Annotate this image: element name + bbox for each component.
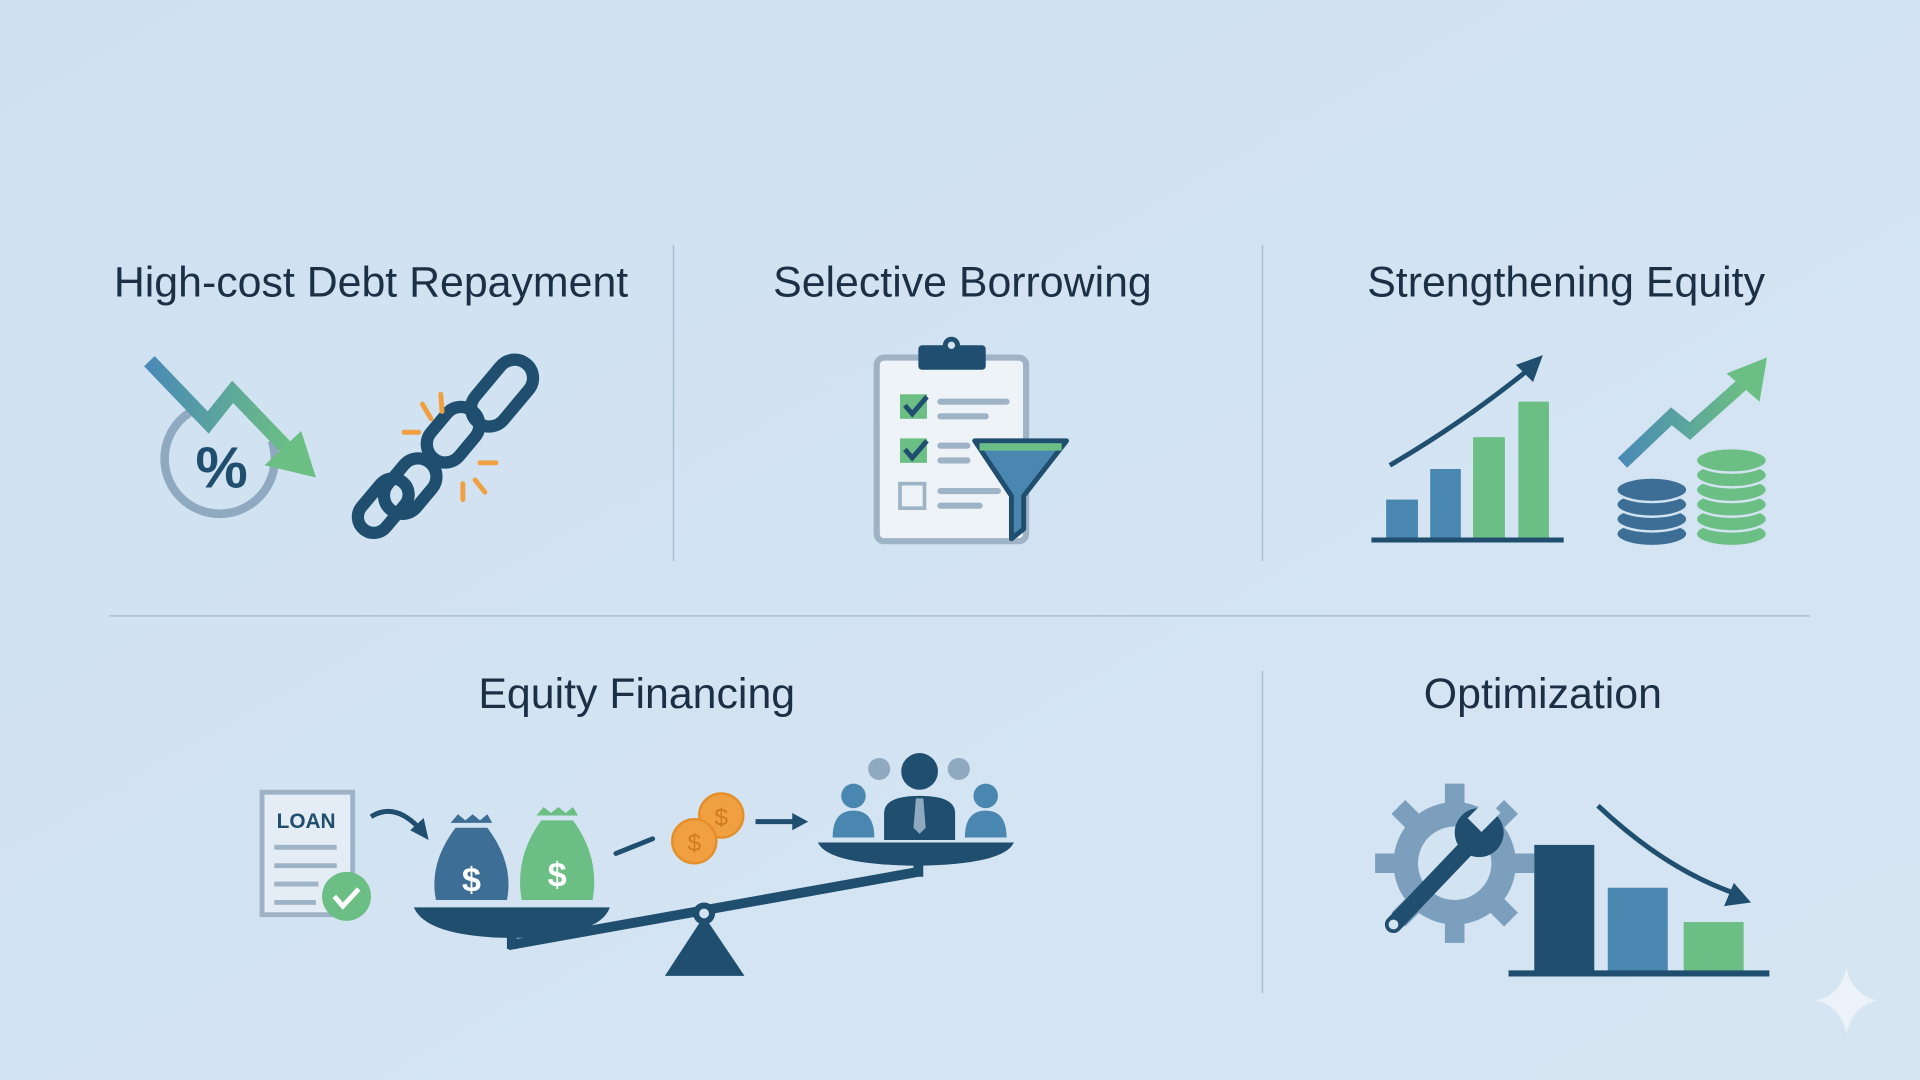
icon: loan document [262,792,371,921]
icon: sparkle [1816,967,1877,1035]
seesaw with bags, coins and investors: $ [548,857,567,895]
icon: coin stacks with arrow [1616,358,1767,546]
icon: gear and wrench [1375,784,1534,943]
icon: broken chain [351,352,541,539]
icon: percent with down arrow: % [195,435,248,500]
icon: declining cost bars [1509,806,1769,973]
seesaw with bags, coins and investors: $ [687,830,701,857]
seesaw with bags, coins and investors: $ [462,861,481,899]
icon: percent with down arrow [149,361,316,514]
title: High-cost Debt Repayment: High-cost Debt Repayment [114,258,628,306]
icon: loan document: LOAN [277,810,336,833]
title: Optimization: Optimization [1424,670,1662,718]
icon: growth bar chart [1371,355,1564,540]
title: Equity Financing: Equity Financing [478,670,795,718]
title: Selective Borrowing: Selective Borrowing [773,258,1152,306]
seesaw with bags, coins and investors: $ [714,804,728,831]
title: Strengthening Equity: Strengthening Equity [1367,258,1766,306]
seesaw with bags, coins and investors [414,753,1014,976]
arrow: loan to bags [371,811,429,840]
icon: clipboard with funnel [877,337,1067,541]
